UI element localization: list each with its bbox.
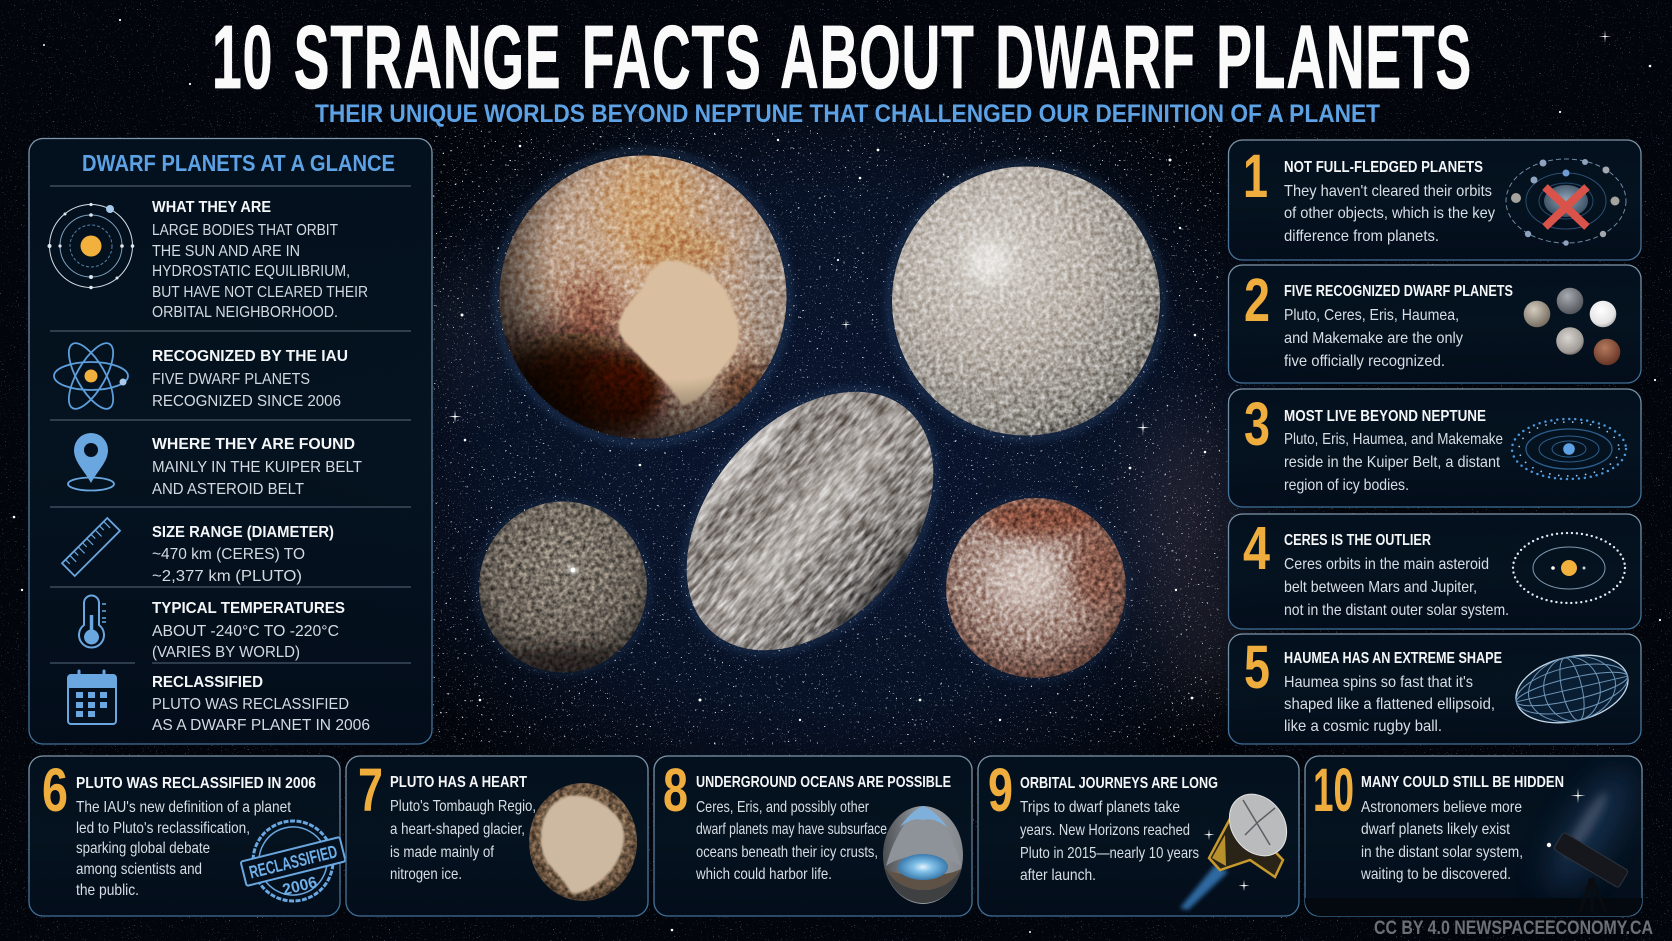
card text: reside in the Kuiper Belt, a distant (1284, 454, 1501, 471)
icon: telescope (1547, 788, 1629, 912)
card text: Pluto's Tombaugh Regio, (390, 798, 536, 815)
description: ORBITAL NEIGHBORHOOD. (152, 304, 338, 321)
number 4: 4 (1243, 514, 1270, 582)
icon: atom (54, 337, 128, 415)
icon: thermometer (79, 596, 106, 648)
description: AS A DWARF PLANET IN 2006 (152, 717, 370, 734)
description: ~2,377 km (PLUTO) (152, 568, 302, 585)
icon: calendar (68, 671, 116, 724)
card text: They haven't cleared their orbits (1284, 183, 1492, 200)
icon: orbits (48, 203, 134, 289)
card heading: NOT FULL-FLEDGED PLANETS (1284, 159, 1483, 176)
card 4: Ceres is the outlier (1228, 514, 1641, 629)
description (152, 222, 368, 321)
icon: Kuiper belt (1512, 419, 1626, 479)
card text: waiting to be discovered. (1360, 866, 1511, 883)
dividers (50, 186, 411, 663)
description (152, 371, 341, 410)
planet: Makemake (944, 496, 1128, 680)
card heading: PLUTO WAS RECLASSIFIED IN 2006 (76, 775, 316, 792)
number 9: 9 (988, 756, 1013, 824)
description (152, 696, 370, 734)
card text: dwarf planets likely exist (1361, 821, 1510, 838)
card text: oceans beneath their icy crusts, (696, 844, 878, 861)
card text: after launch. (1020, 867, 1096, 884)
card text: led to Pluto's reclassification, (76, 820, 250, 837)
number 1: 1 (1243, 142, 1268, 210)
small Pluto image (529, 783, 637, 901)
card text: Haumea spins so fast that it's (1284, 674, 1473, 691)
stamp: reclassified 2006 (234, 810, 352, 912)
card text: and Makemake are the only (1284, 330, 1463, 347)
card text: dwarf planets may have subsurface (696, 821, 887, 838)
stamp: reclassified 2006: RECLASSIFIED (247, 841, 339, 883)
row: what they are (48, 199, 368, 321)
heading: RECOGNIZED BY THE IAU (152, 348, 348, 365)
description (152, 623, 339, 661)
number 7: 7 (358, 756, 383, 824)
row: recognized by the IAU (54, 337, 348, 415)
card text: sparking global debate (76, 840, 210, 857)
heading: WHERE THEY ARE FOUND (152, 436, 355, 453)
card text: in the distant solar system, (1361, 844, 1523, 861)
description: THE SUN AND ARE IN (152, 243, 300, 260)
card 8: underground oceans (654, 756, 972, 916)
card text: Pluto, Eris, Haumea, and Makemake (1284, 431, 1503, 448)
card heading: CERES IS THE OUTLIER (1284, 532, 1431, 549)
card text: shaped like a flattened ellipsoid, (1284, 696, 1495, 713)
icon: ruler (62, 518, 120, 576)
description (152, 459, 363, 498)
bright spot (568, 565, 578, 575)
card heading: FIVE RECOGNIZED DWARF PLANETS (1284, 283, 1513, 300)
planet: Ceres (477, 501, 649, 678)
card text (695, 799, 887, 883)
background: brighter stars (430, 125, 1220, 745)
card 9: orbital journeys (978, 756, 1299, 916)
number 5: 5 (1244, 633, 1270, 701)
card text: like a cosmic rugby ball. (1284, 718, 1442, 735)
card text (1360, 799, 1523, 883)
card text: region of icy bodies. (1284, 477, 1409, 494)
icon: crossed-out orbit (1506, 159, 1626, 246)
card text: which could harbor life. (695, 866, 832, 883)
card text: Trips to dwarf planets take (1020, 799, 1180, 816)
row: reclassified (68, 671, 370, 734)
card text (1284, 674, 1495, 735)
number 10: 10 (1313, 756, 1354, 824)
card 6: Pluto was reclassified (29, 756, 352, 916)
card text: of other objects, which is the key (1284, 205, 1495, 222)
planet: Haumea (680, 385, 940, 658)
card text: not in the distant outer solar system. (1284, 602, 1509, 619)
card text: a heart-shaped glacier, (390, 821, 525, 838)
planet: Eris (889, 164, 1163, 438)
description: LARGE BODIES THAT ORBIT (152, 222, 338, 239)
description: PLUTO WAS RECLASSIFIED (152, 696, 349, 713)
row: where they are found (68, 433, 363, 498)
card text: Ceres orbits in the main asteroid (1284, 556, 1489, 573)
card heading: MOST LIVE BEYOND NEPTUNE (1284, 408, 1486, 425)
background: faint brown nebula patches (435, 260, 1255, 700)
heading: WHAT THEY ARE (152, 199, 271, 216)
card text (390, 798, 536, 883)
card 2: five recognized dwarf planets (1228, 265, 1641, 383)
panel: dwarf planets at a glance (29, 138, 432, 744)
icon: five small planets (1524, 288, 1620, 365)
description: ABOUT -240°C TO -220°C (152, 623, 339, 640)
description: FIVE DWARF PLANETS (152, 371, 310, 388)
card text: difference from planets. (1284, 228, 1439, 245)
planet: Pluto (487, 151, 794, 444)
card 7: Pluto has a heart (346, 756, 648, 916)
card text: Ceres, Eris, and possibly other (696, 799, 870, 816)
card text (1284, 183, 1495, 245)
row: typical temperatures (79, 596, 345, 661)
number 6: 6 (42, 756, 68, 824)
heading: SIZE RANGE (DIAMETER) (152, 524, 334, 541)
card text (1284, 556, 1509, 619)
number 8: 8 (663, 756, 688, 824)
card text (76, 799, 291, 899)
card text: The IAU's new definition of a planet (76, 799, 291, 816)
card heading: PLUTO HAS A HEART (390, 774, 527, 791)
subtitle: THEIR UNIQUE WORLDS BEYOND NEPTUNE THAT CHALLENGED OUR DEFINITION OF A PLANET (315, 100, 1380, 128)
description: ~470 km (CERES) TO (152, 546, 305, 563)
stamp: reclassified 2006: 2006 (281, 874, 319, 899)
card 10: many could still be hidden (1305, 756, 1646, 916)
card text: among scientists and (76, 861, 202, 878)
background: central navy nebula glow (300, 110, 1360, 770)
description: RECOGNIZED SINCE 2006 (152, 393, 341, 410)
card heading: MANY COULD STILL BE HIDDEN (1361, 774, 1564, 791)
card heading: UNDERGROUND OCEANS ARE POSSIBLE (696, 774, 951, 791)
icon: ellipsoid grid (1509, 645, 1635, 733)
heart region (619, 260, 739, 405)
number 2: 2 (1244, 266, 1270, 334)
heading: RECLASSIFIED (152, 674, 263, 691)
description (152, 546, 305, 585)
milky way scene (1305, 759, 1646, 916)
card text (1020, 799, 1199, 884)
card text: belt between Mars and Jupiter, (1284, 579, 1477, 596)
icon: map pin (68, 433, 114, 490)
card text: Pluto in 2015—nearly 10 years (1020, 845, 1199, 862)
card text: is made mainly of (390, 844, 494, 861)
card 5: Haumea has an extreme shape (1228, 633, 1641, 744)
card text (1284, 431, 1503, 494)
icon: New Horizons spacecraft (1180, 783, 1298, 910)
description: (VARIES BY WORLD) (152, 644, 300, 661)
panel heading: DWARF PLANETS AT A GLANCE (82, 150, 395, 176)
number 3: 3 (1244, 390, 1270, 458)
card heading: ORBITAL JOURNEYS ARE LONG (1020, 775, 1218, 792)
card text (1284, 307, 1463, 370)
card heading: HAUMEA HAS AN EXTREME SHAPE (1284, 650, 1502, 667)
icon: asteroid belt orbit (1513, 533, 1625, 603)
card text: Astronomers believe more (1361, 799, 1522, 816)
card 3: most live beyond Neptune (1228, 389, 1641, 507)
heading: TYPICAL TEMPERATURES (152, 600, 345, 617)
card text: Pluto, Ceres, Eris, Haumea, (1284, 307, 1459, 324)
card text: nitrogen ice. (390, 866, 462, 883)
description: MAINLY IN THE KUIPER BELT (152, 459, 363, 476)
card text: years. New Horizons reached (1020, 822, 1190, 839)
row: size range (62, 518, 334, 585)
description: BUT HAVE NOT CLEARED THEIR (152, 284, 368, 301)
description: HYDROSTATIC EQUILIBRIUM, (152, 263, 350, 280)
flare stars (448, 30, 1611, 434)
card text: five officially recognized. (1284, 353, 1445, 370)
icon: interior cutaway (883, 806, 963, 904)
card text: the public. (76, 882, 139, 899)
description: AND ASTEROID BELT (152, 481, 305, 498)
card 1: not full-fledged planets (1228, 140, 1641, 260)
